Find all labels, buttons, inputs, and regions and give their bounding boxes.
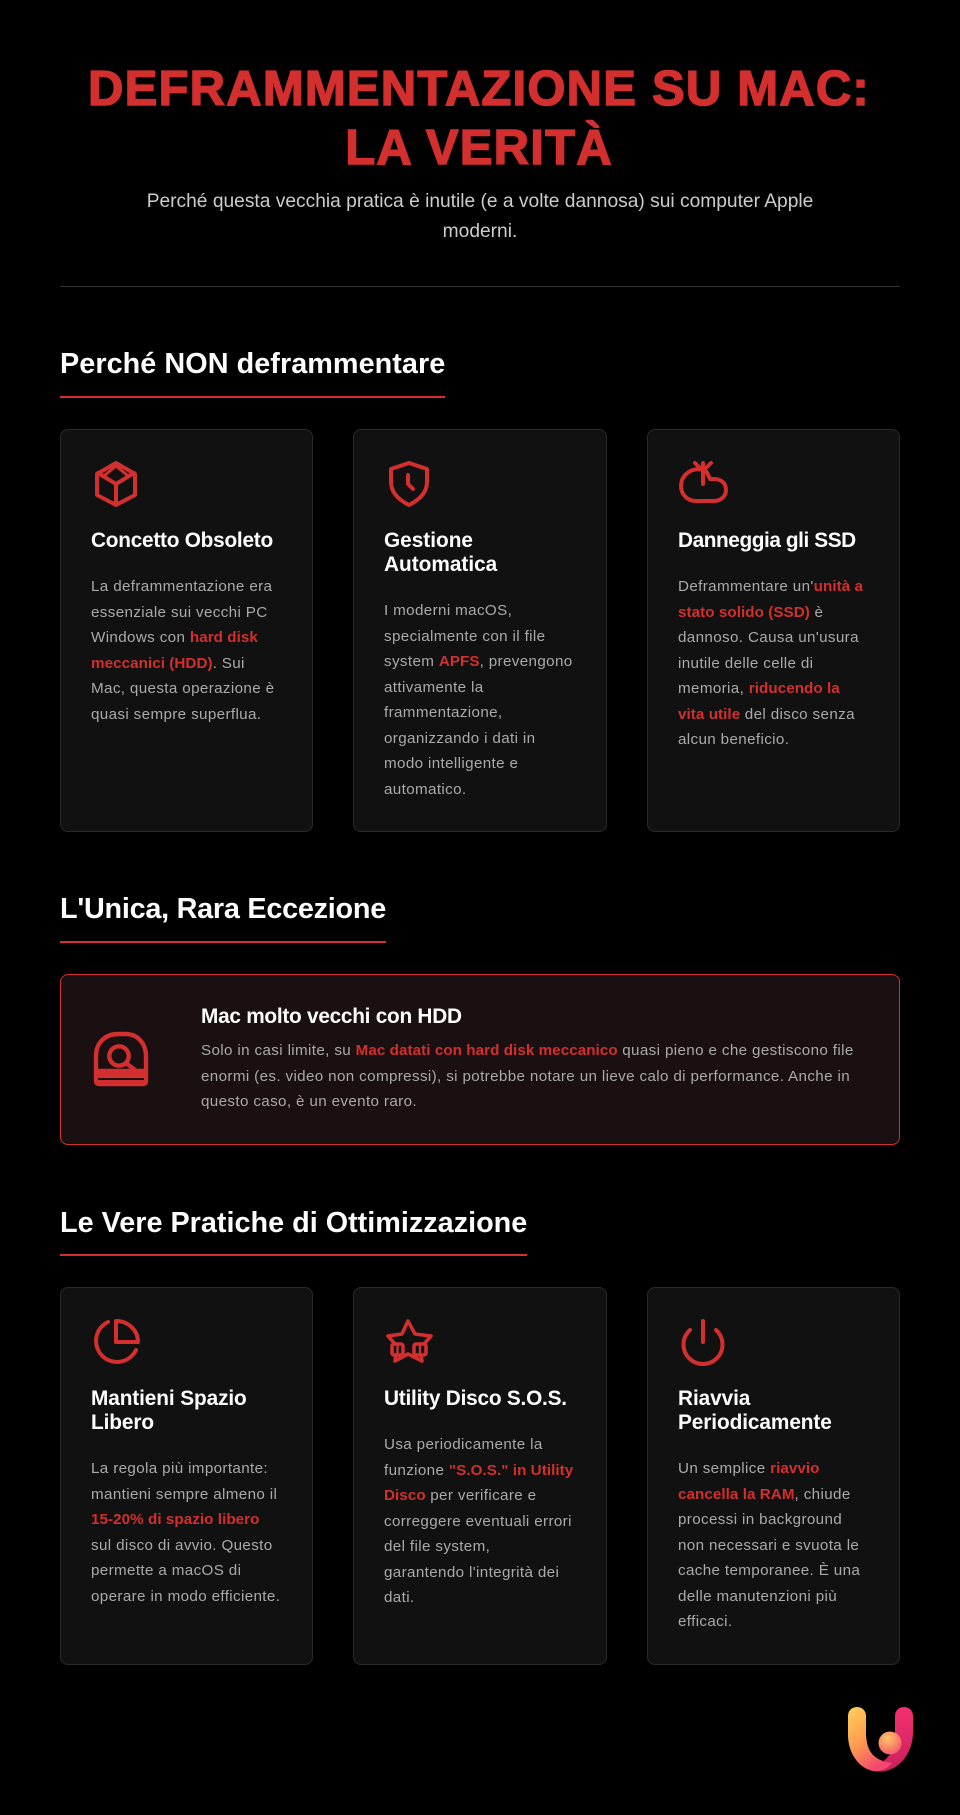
card text: delle manutenzioni più (678, 1588, 837, 1604)
card text (91, 578, 274, 722)
card text: frammentazione, (384, 704, 503, 721)
card text: efficaci. (678, 1613, 732, 1630)
subtitle: Perché questa vecchia pratica è inutile (e a volte dannosa) sui computer Apple (147, 191, 813, 212)
icon: cube (95, 461, 137, 507)
card text (384, 602, 573, 798)
card text: La regola più importante: (91, 1460, 268, 1477)
card title: Automatica (384, 553, 497, 576)
card text: I moderni macOS, (384, 602, 512, 619)
card text: Usa periodicamente la (384, 1436, 543, 1453)
card text: funzione "S.O.S." in Utility (384, 1462, 573, 1478)
card text: processi in background (678, 1511, 842, 1528)
card text: vita utile del disco senza (678, 706, 855, 722)
heading: le vere pratiche di ottimizzazione: Le Vere Pratiche di Ottimizzazione (60, 1207, 527, 1239)
icon: star with binoculars (386, 1319, 433, 1363)
panel: riavvia periodicamente (647, 1287, 900, 1665)
icon: shield clock (389, 461, 429, 507)
card text: modo intelligente e (384, 755, 518, 772)
exception text: questo caso, è un evento raro. (201, 1093, 417, 1110)
card text: Disco per verificare e (384, 1487, 536, 1504)
card title: Periodicamente (678, 1411, 832, 1434)
exception text: Solo in casi limite, su Mac datati con hard disk meccanico quasi pieno e che gestiscono file (201, 1042, 854, 1059)
card text: Deframmentare un'unità a (678, 578, 863, 595)
icon: power (682, 1319, 724, 1366)
card title: Utility Disco S.O.S. (384, 1387, 567, 1410)
subtitle: moderni. (443, 221, 517, 242)
card text: operare in modo efficiente. (91, 1588, 280, 1604)
card title (678, 1387, 832, 1434)
card text (384, 1436, 574, 1606)
card text: permette a macOS di (91, 1562, 241, 1579)
panel: eccezione (60, 974, 900, 1145)
card title: Concetto Obsoleto (91, 529, 273, 552)
card text: essenziale sui vecchi PC (91, 604, 268, 620)
card text: Un semplice riavvio (678, 1460, 820, 1477)
card text: correggere eventuali errori (384, 1512, 572, 1530)
card text: alcun beneficio. (678, 731, 789, 748)
card text: quasi sempre superflua. (91, 706, 261, 722)
card title: Riavvia (678, 1387, 750, 1410)
card title: Libero (91, 1411, 154, 1434)
panel: mantieni spazio libero (60, 1287, 313, 1665)
icon: cloud (679, 460, 728, 503)
panel: danneggia gli ssd (647, 429, 900, 832)
card title: Gestione (384, 529, 473, 552)
title: LA VERITÀ (345, 121, 613, 175)
exception text (201, 1042, 854, 1110)
card text: stato solido (SSD) è (678, 604, 823, 620)
heading: l'unica, rara eccezione: L'Unica, Rara Eccezione (60, 893, 386, 925)
card text (91, 1460, 280, 1604)
card text (678, 578, 864, 748)
icon: disk with magnifier (94, 1032, 148, 1086)
card text: del file system, (384, 1538, 490, 1555)
card title: Danneggia gli SSD (678, 529, 856, 552)
card title (91, 1387, 247, 1434)
card text: 15-20% di spazio libero (91, 1511, 260, 1528)
card text: non necessari e svuota le (678, 1536, 859, 1554)
exception text: enormi (es. video non compressi), si potrebbe notare un lieve calo di performance. Anche in (201, 1068, 850, 1084)
panel: gestione automatica (353, 429, 607, 832)
card text (678, 1460, 860, 1630)
title: DEFRAMMENTAZIONE SU MAC: (88, 62, 870, 116)
card text: memoria, riducendo la (678, 680, 840, 697)
card text: sul disco di avvio. Questo (91, 1536, 273, 1554)
card text: meccanici (HDD). Sui (91, 654, 245, 672)
panel: utility disco sos (353, 1287, 607, 1665)
card text: Windows con hard disk (91, 629, 258, 646)
card text: dannoso. Causa un'usura (678, 629, 859, 646)
card text: garantendo l'integrità dei (384, 1564, 559, 1580)
card text: La deframmentazione era (91, 578, 272, 595)
card text: automatico. (384, 780, 466, 798)
card text: organizzando i dati in (384, 730, 535, 746)
card text: Mac, questa operazione è (91, 680, 274, 697)
card text: attivamente la (384, 678, 484, 696)
card text: cache temporanee. È una (678, 1562, 860, 1579)
card text: system APFS, prevengono (384, 653, 573, 670)
title (88, 62, 870, 175)
card text: dati. (384, 1589, 415, 1606)
card title: Mantieni Spazio (91, 1387, 247, 1410)
subtitle (147, 191, 813, 242)
icon: pie chart (94, 1319, 140, 1364)
panel: concetto obsoleto (60, 429, 313, 832)
card text: specialmente con il file (384, 628, 545, 644)
card text: mantieni sempre almeno il (91, 1486, 277, 1502)
card title (384, 529, 498, 576)
card text: cancella la RAM, chiude (678, 1486, 851, 1502)
logo (848, 1707, 913, 1772)
card text: inutile delle celle di (678, 654, 813, 672)
exception title: Mac molto vecchi con HDD (201, 1005, 462, 1028)
heading: perché non deframmentare: Perché NON deframmentare (60, 348, 445, 380)
